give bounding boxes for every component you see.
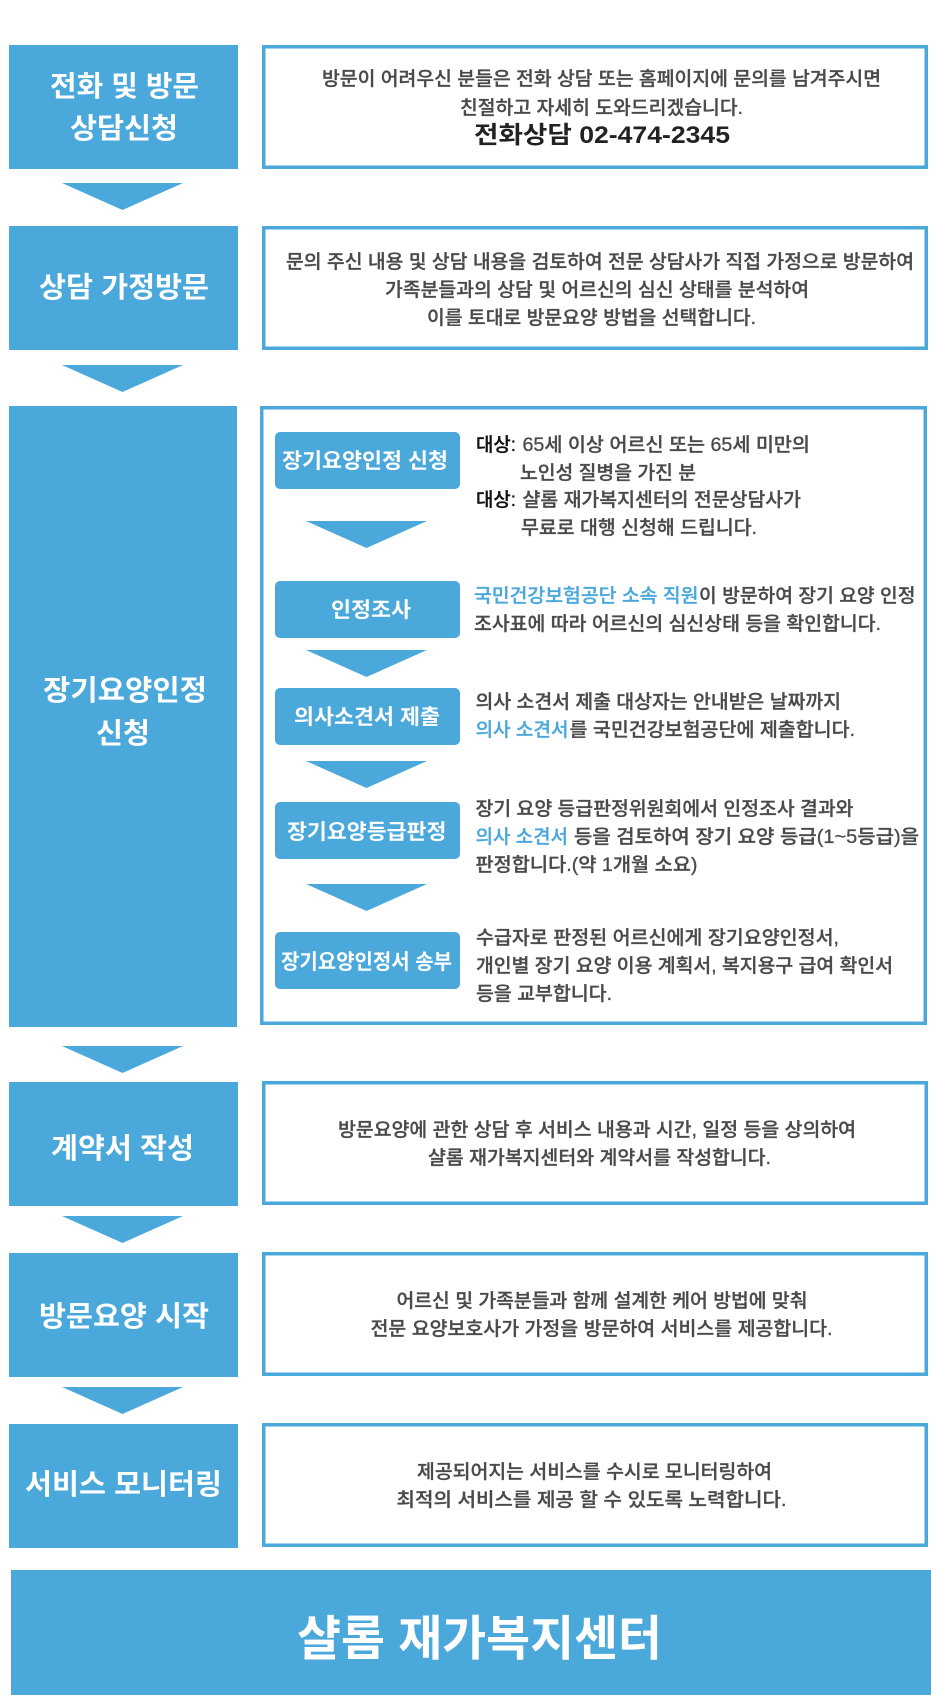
sub-step text: certificate delivery description: 등을 교부합니다. <box>476 983 612 1005</box>
step 1 heading: phone and visit consultation request: 전화 및 방문 <box>50 71 199 103</box>
sub-step button: certification survey: 인정조사 <box>331 599 411 622</box>
arrow: step 3 to step 4 <box>62 1046 183 1073</box>
sub-step text: application eligibility and proxy service: 65세 이상 어르신 또는 65세 미만의 <box>522 434 810 456</box>
step 5 description panel: 어르신 및 가족분들과 함께 설계한 케어 방법에 맞춰 <box>396 1290 808 1312</box>
sub-step button: certification application <box>275 432 460 489</box>
sub-step text: application eligibility and proxy service: 무료로 대행 신청해 드립니다. <box>521 517 757 539</box>
sub-step button: doctor's opinion submission: 의사소견서 제출 <box>294 706 440 729</box>
step 2 heading: home visit consultation <box>9 226 238 350</box>
sub-step button: care grade decision <box>275 802 460 859</box>
step 6 description panel <box>264 1425 926 1545</box>
step 1 description panel: 방문이 어려우신 분들은 전화 상담 또는 홈페이지에 문의를 남겨주시면 <box>322 68 881 90</box>
step 1 heading: phone and visit consultation request: 상담신청 <box>70 113 178 145</box>
inner arrow 3 <box>306 761 427 788</box>
sub-step text: certificate delivery description: 개인별 장기 요양 이용 계획서, 복지용구 급여 확인서 <box>476 955 893 977</box>
inner arrow 2 <box>306 650 427 677</box>
step 2 description panel: 가족분들과의 상담 및 어르신의 심신 상태를 분석하여 <box>385 279 809 301</box>
inner arrow 4 <box>306 884 427 911</box>
step 3 heading: long-term care certification request: 신청 <box>96 718 150 750</box>
sub-step text: application eligibility and proxy service: 샬롬 재가복지센터의 전문상담사가 <box>522 489 801 511</box>
sub-step text: certificate delivery description <box>476 927 893 1005</box>
step 4 heading: contract <box>9 1082 238 1206</box>
sub-step text: doctor's opinion description <box>476 691 855 741</box>
sub-step button: care grade decision: 장기요양등급판정 <box>287 821 446 844</box>
sub-step text: certificate delivery description: 수급자로 판정된 어르신에게 장기요양인정서, <box>476 927 839 949</box>
sub-step text: survey description: 조사표에 따라 어르신의 심신상태 등을 확인합니다. <box>474 613 881 635</box>
step 1 heading: phone and visit consultation request <box>9 45 238 169</box>
sub-step text: doctor's opinion description: 를 국민건강보험공단에 제출합니다. <box>570 719 855 741</box>
step 4 description panel: 방문요양에 관한 상담 후 서비스 내용과 시간, 일정 등을 상의하여 <box>338 1119 856 1141</box>
arrow: step 1 to step 2 <box>62 183 183 210</box>
inner arrow 1 <box>306 521 427 548</box>
step 2 description panel: 문의 주신 내용 및 상담 내용을 검토하여 전문 상담사가 직접 가정으로 방문하여 <box>286 251 914 273</box>
sub-step text: doctor's opinion description: 의사 소견서 <box>476 719 568 741</box>
step 5 description panel <box>264 1254 926 1374</box>
sub-step text: application eligibility and proxy service: 대상: <box>476 434 516 456</box>
step 6 description panel: 최적의 서비스를 제공 할 수 있도록 노력합니다. <box>396 1489 786 1511</box>
arrow: step 2 to step 3 <box>62 365 183 392</box>
step 1 description panel <box>264 47 926 167</box>
sub-step text: grade decision description: 장기 요양 등급판정위원회에서 인정조사 결과와 <box>476 798 854 820</box>
sub-step text: survey description: 이 방문하여 장기 요양 인정 <box>699 585 916 607</box>
step 3 heading: long-term care certification request <box>9 406 237 1027</box>
sub-step text: grade decision description: 의사 소견서 <box>476 826 568 848</box>
sub-step text: application eligibility and proxy service: 노인성 질병을 가진 분 <box>520 462 696 484</box>
arrow: step 4 to step 5 <box>62 1216 183 1243</box>
footer banner: center name <box>11 1570 931 1695</box>
footer banner: center name: 샬롬 재가복지센터 <box>297 1613 662 1666</box>
sub-step button: certification application: 장기요양인정 신청 <box>282 450 448 473</box>
step 1 description panel: 전화상담 02-474-2345 <box>474 122 730 149</box>
step 5 heading: start of home care <box>9 1253 238 1377</box>
step 4 description panel <box>264 1083 926 1203</box>
step 2 heading: home visit consultation: 상담 가정방문 <box>39 272 209 304</box>
sub-step text: survey description <box>474 585 916 635</box>
step 2 description panel: 이를 토대로 방문요양 방법을 선택합니다. <box>427 307 756 329</box>
sub-step text: grade decision description: 판정합니다.(약 1개월 소요) <box>476 854 698 876</box>
sub-step text: application eligibility and proxy service <box>476 434 810 539</box>
sub-step text: grade decision description: 등을 검토하여 장기 요양 등급(1~5등급)을 <box>574 826 919 848</box>
step 4 description panel: 샬롬 재가복지센터와 계약서를 작성합니다. <box>428 1147 771 1169</box>
step 5 description panel: 전문 요양보호사가 가정을 방문하여 서비스를 제공합니다. <box>370 1318 832 1340</box>
sub-step button: certification survey <box>275 581 460 638</box>
sub-step button: doctor's opinion submission <box>275 688 460 745</box>
step 3 heading: long-term care certification request: 장기요양인정 <box>43 675 207 707</box>
sub-step text: doctor's opinion description: 의사 소견서 제출 대상자는 안내받은 날짜까지 <box>476 691 841 713</box>
step 3 detail panel <box>262 408 925 1023</box>
sub-step text: application eligibility and proxy service: 대상: <box>476 489 516 511</box>
step 4 heading: contract: 계약서 작성 <box>51 1133 194 1165</box>
sub-step text: survey description: 국민건강보험공단 소속 직원 <box>474 585 698 607</box>
arrow: step 5 to step 6 <box>62 1387 183 1414</box>
sub-step text: grade decision description <box>476 798 919 876</box>
sub-step button: certificate delivery: 장기요양인정서 송부 <box>281 951 452 974</box>
step 6 heading: service monitoring: 서비스 모니터링 <box>25 1469 222 1501</box>
step 1 description panel: 친절하고 자세히 도와드리겠습니다. <box>460 97 743 119</box>
step 6 heading: service monitoring <box>9 1424 238 1548</box>
step 5 heading: start of home care: 방문요양 시작 <box>39 1301 209 1333</box>
step 2 description panel <box>264 228 926 348</box>
step 6 description panel: 제공되어지는 서비스를 수시로 모니터링하여 <box>417 1461 772 1483</box>
sub-step button: certificate delivery <box>275 932 460 989</box>
